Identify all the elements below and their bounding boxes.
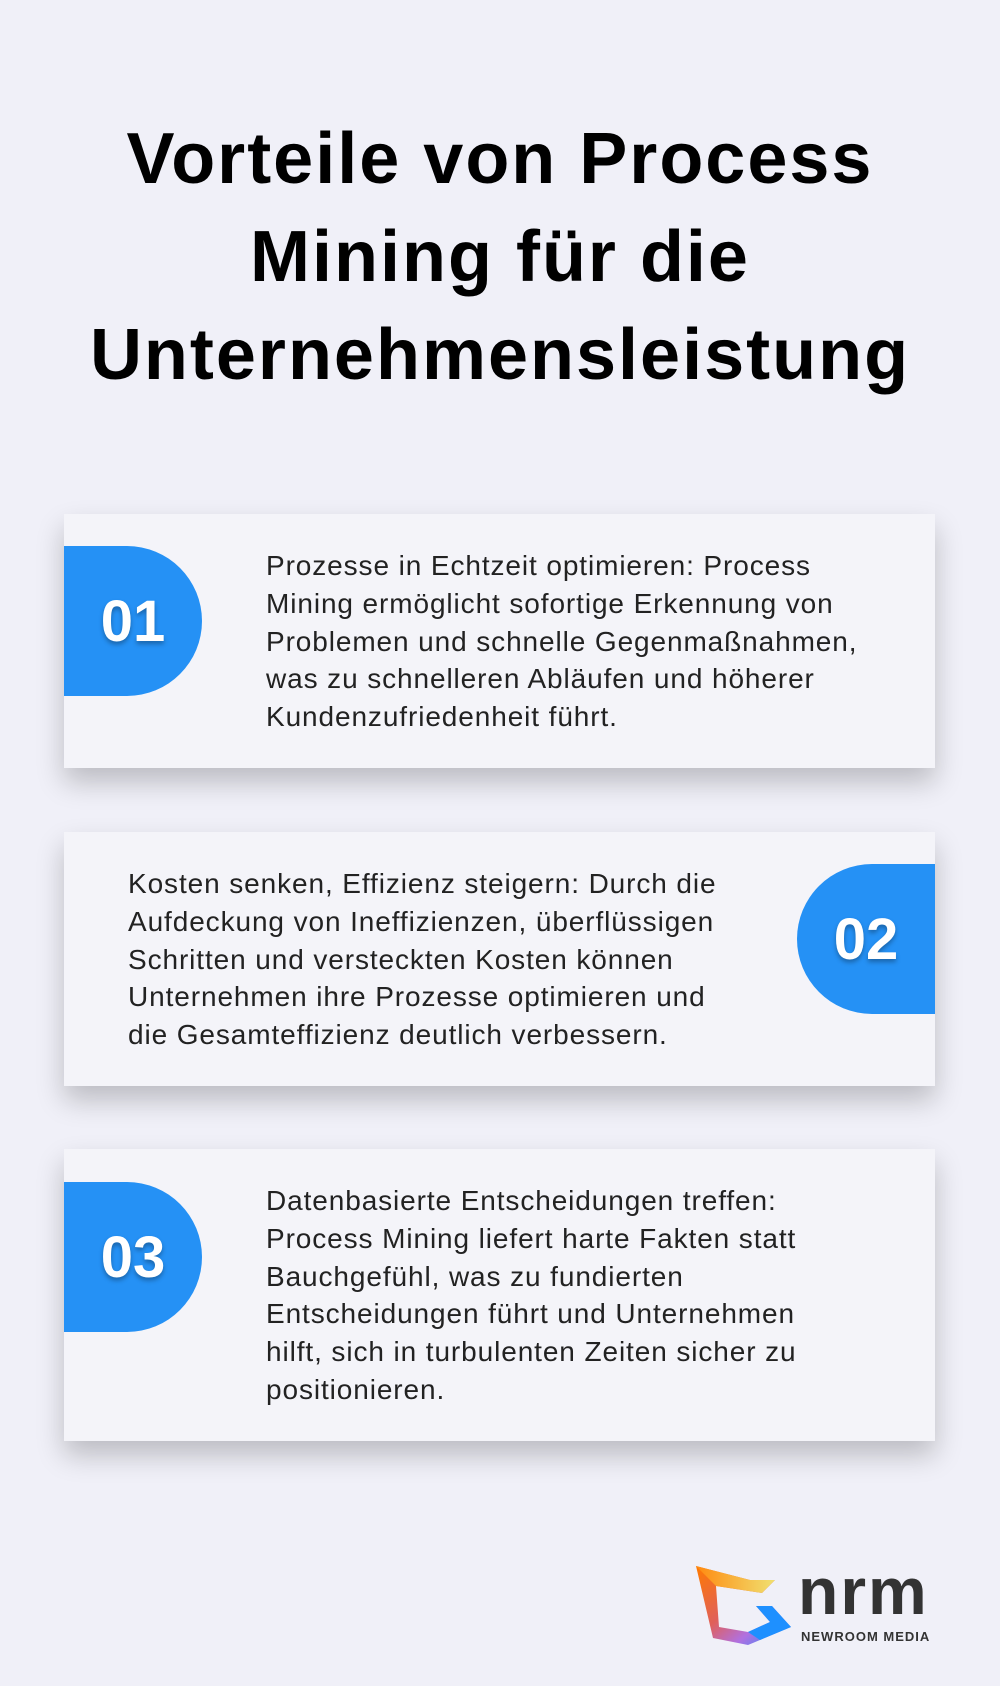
text 3: Datenbasierte Entscheidungen treffen: (266, 1185, 777, 1216)
panel: card 2 (64, 832, 935, 1086)
badge 03 (64, 1182, 202, 1332)
text 3: Process Mining liefert harte Fakten statt (266, 1223, 796, 1254)
badge 01: 01 (101, 588, 165, 654)
text 2: Schritten und versteckten Kosten können (128, 944, 674, 975)
title: Unternehmensleistung (90, 315, 910, 395)
panel: card 1 (64, 514, 935, 768)
badge 02: 02 (834, 906, 898, 972)
badge 01 (64, 546, 202, 696)
text 2: die Gesamteffizienz deutlich verbessern. (128, 1019, 668, 1050)
text 3: positionieren. (266, 1374, 445, 1405)
text 2: Kosten senken, Effizienz steigern: Durch die (128, 868, 716, 899)
text 1 (266, 550, 857, 732)
logo (696, 1554, 930, 1645)
text 2 (128, 868, 716, 1050)
text 1: Mining ermöglicht sofortige Erkennung von (266, 588, 834, 619)
text 1: Problemen und schnelle Gegenmaßnahmen, (266, 626, 857, 657)
icon: logo mark (696, 1566, 791, 1645)
title (90, 119, 910, 395)
logo: NEWROOM MEDIA (801, 1629, 930, 1644)
text 2: Aufdeckung von Ineffizienzen, überflüssigen (128, 906, 714, 937)
text 1: was zu schnelleren Abläufen und höherer (266, 663, 815, 694)
text 1: Prozesse in Echtzeit optimieren: Process (266, 550, 811, 581)
title: Mining für die (250, 217, 750, 297)
logo text: nrm (798, 1554, 929, 1628)
text 3 (266, 1185, 797, 1405)
panel: card 3 (64, 1149, 935, 1441)
text 3: hilft, sich in turbulenten Zeiten sicher zu (266, 1336, 797, 1367)
text 3: Bauchgefühl, was zu fundierten (266, 1261, 684, 1292)
text 3: Entscheidungen führt und Unternehmen (266, 1298, 795, 1329)
badge 02 (797, 864, 935, 1014)
title: Vorteile von Process (127, 119, 873, 199)
text 2: Unternehmen ihre Prozesse optimieren und (128, 981, 706, 1012)
badge 03: 03 (101, 1224, 165, 1290)
text 1: Kundenzufriedenheit führt. (266, 701, 618, 732)
